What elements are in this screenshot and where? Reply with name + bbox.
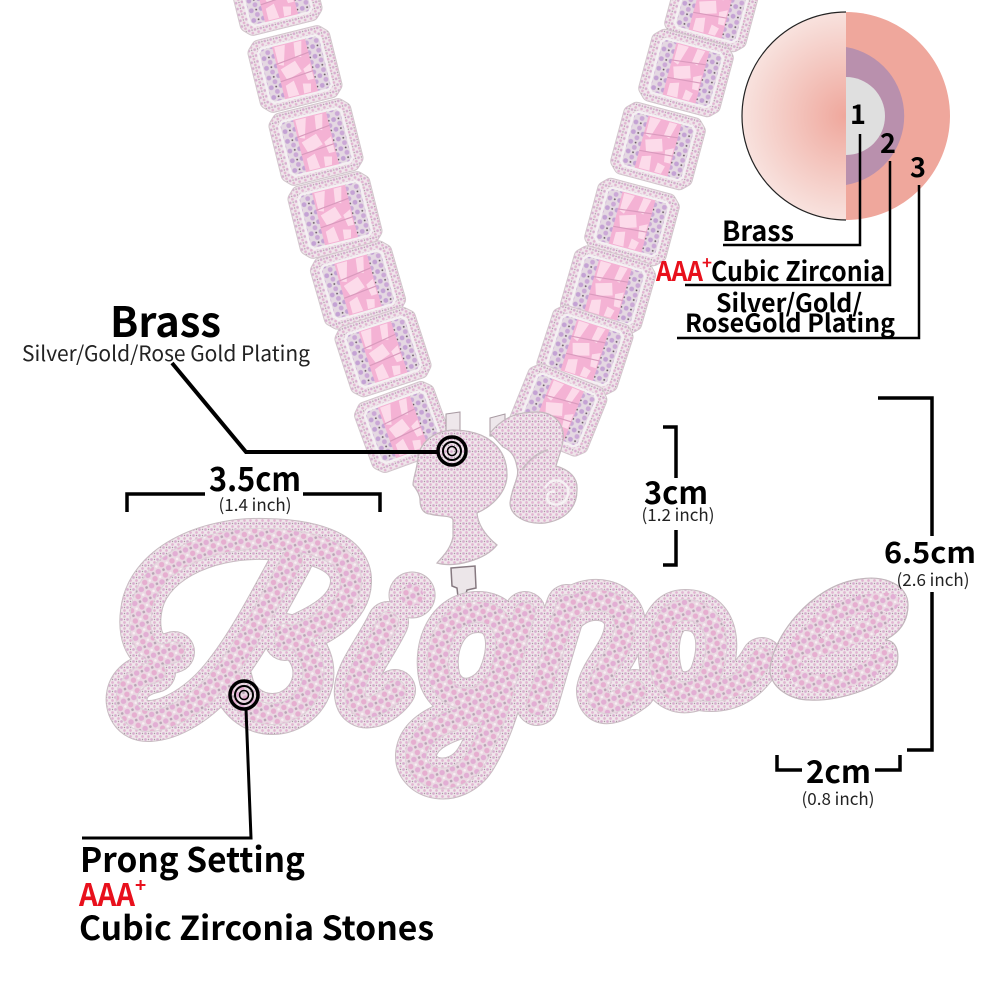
label: AAA+ Cubic Zirconia: + — [702, 249, 712, 274]
layer diagram: cross-section circle — [742, 12, 950, 220]
dimension: height 3cm — [642, 427, 714, 565]
layer number 3: 3 — [910, 146, 926, 185]
callout line: brass to head charm — [172, 363, 438, 452]
target marker: prong setting — [230, 681, 258, 709]
leader line: zirconia layer — [685, 161, 890, 285]
dimension: width 2cm: 2cm — [806, 747, 871, 792]
label: AAA+ Cubic Zirconia: AAA — [655, 250, 704, 289]
callout text: prong setting: Prong Setting — [80, 833, 305, 882]
pendant: script name lettering — [127, 539, 762, 779]
label: plating layer: Silver/Gold/ — [716, 284, 862, 320]
callout: Brass heading: Brass — [110, 289, 221, 350]
dimension: width 3.5cm: (1.4 inch) — [219, 491, 291, 516]
necklace: left tennis chain — [225, 0, 455, 476]
dimension: width 2cm — [777, 747, 900, 810]
leader line: brass layer — [723, 134, 860, 245]
layer number 2: 2 — [880, 122, 896, 161]
dimension: height 3cm: (1.2 inch) — [642, 501, 714, 526]
target marker: head charm — [438, 437, 466, 465]
necklace: right tennis chain — [505, 0, 762, 460]
dimension: width 3.5cm: 3.5cm — [209, 453, 301, 501]
callout: plating subtitle: Silver/Gold/Rose Gold Plating — [22, 338, 310, 368]
layer number 1: 1 — [850, 93, 866, 132]
pendant: lips charm — [770, 578, 908, 700]
label: plating layer: RoseGold Plating — [685, 304, 895, 340]
dimension: height 6.5cm: (2.6 inch) — [897, 566, 969, 591]
callout text: prong setting: AAA — [78, 870, 135, 915]
dimension: height 6.5cm: 6.5cm — [884, 530, 976, 572]
label: AAA+ Cubic Zirconia — [655, 249, 885, 289]
leader line: plating layer — [677, 185, 919, 338]
dimension: height 6.5cm — [878, 398, 976, 750]
dimension: height 3cm: 3cm — [644, 468, 708, 513]
callout text: prong setting: + — [135, 871, 146, 898]
dimension: width 3.5cm — [127, 453, 380, 516]
dimension: width 2cm: (0.8 inch) — [802, 785, 874, 810]
label: Brass layer: Brass — [722, 210, 794, 250]
label: AAA+ Cubic Zirconia: Cubic Zirconia — [711, 250, 885, 289]
callout text: prong setting: Cubic Zirconia Stones — [79, 902, 434, 950]
callout text: prong setting — [78, 833, 434, 950]
label: plating layer — [685, 284, 895, 340]
pendant: girl head charm — [413, 412, 577, 597]
callout line: prong setting — [82, 709, 251, 838]
